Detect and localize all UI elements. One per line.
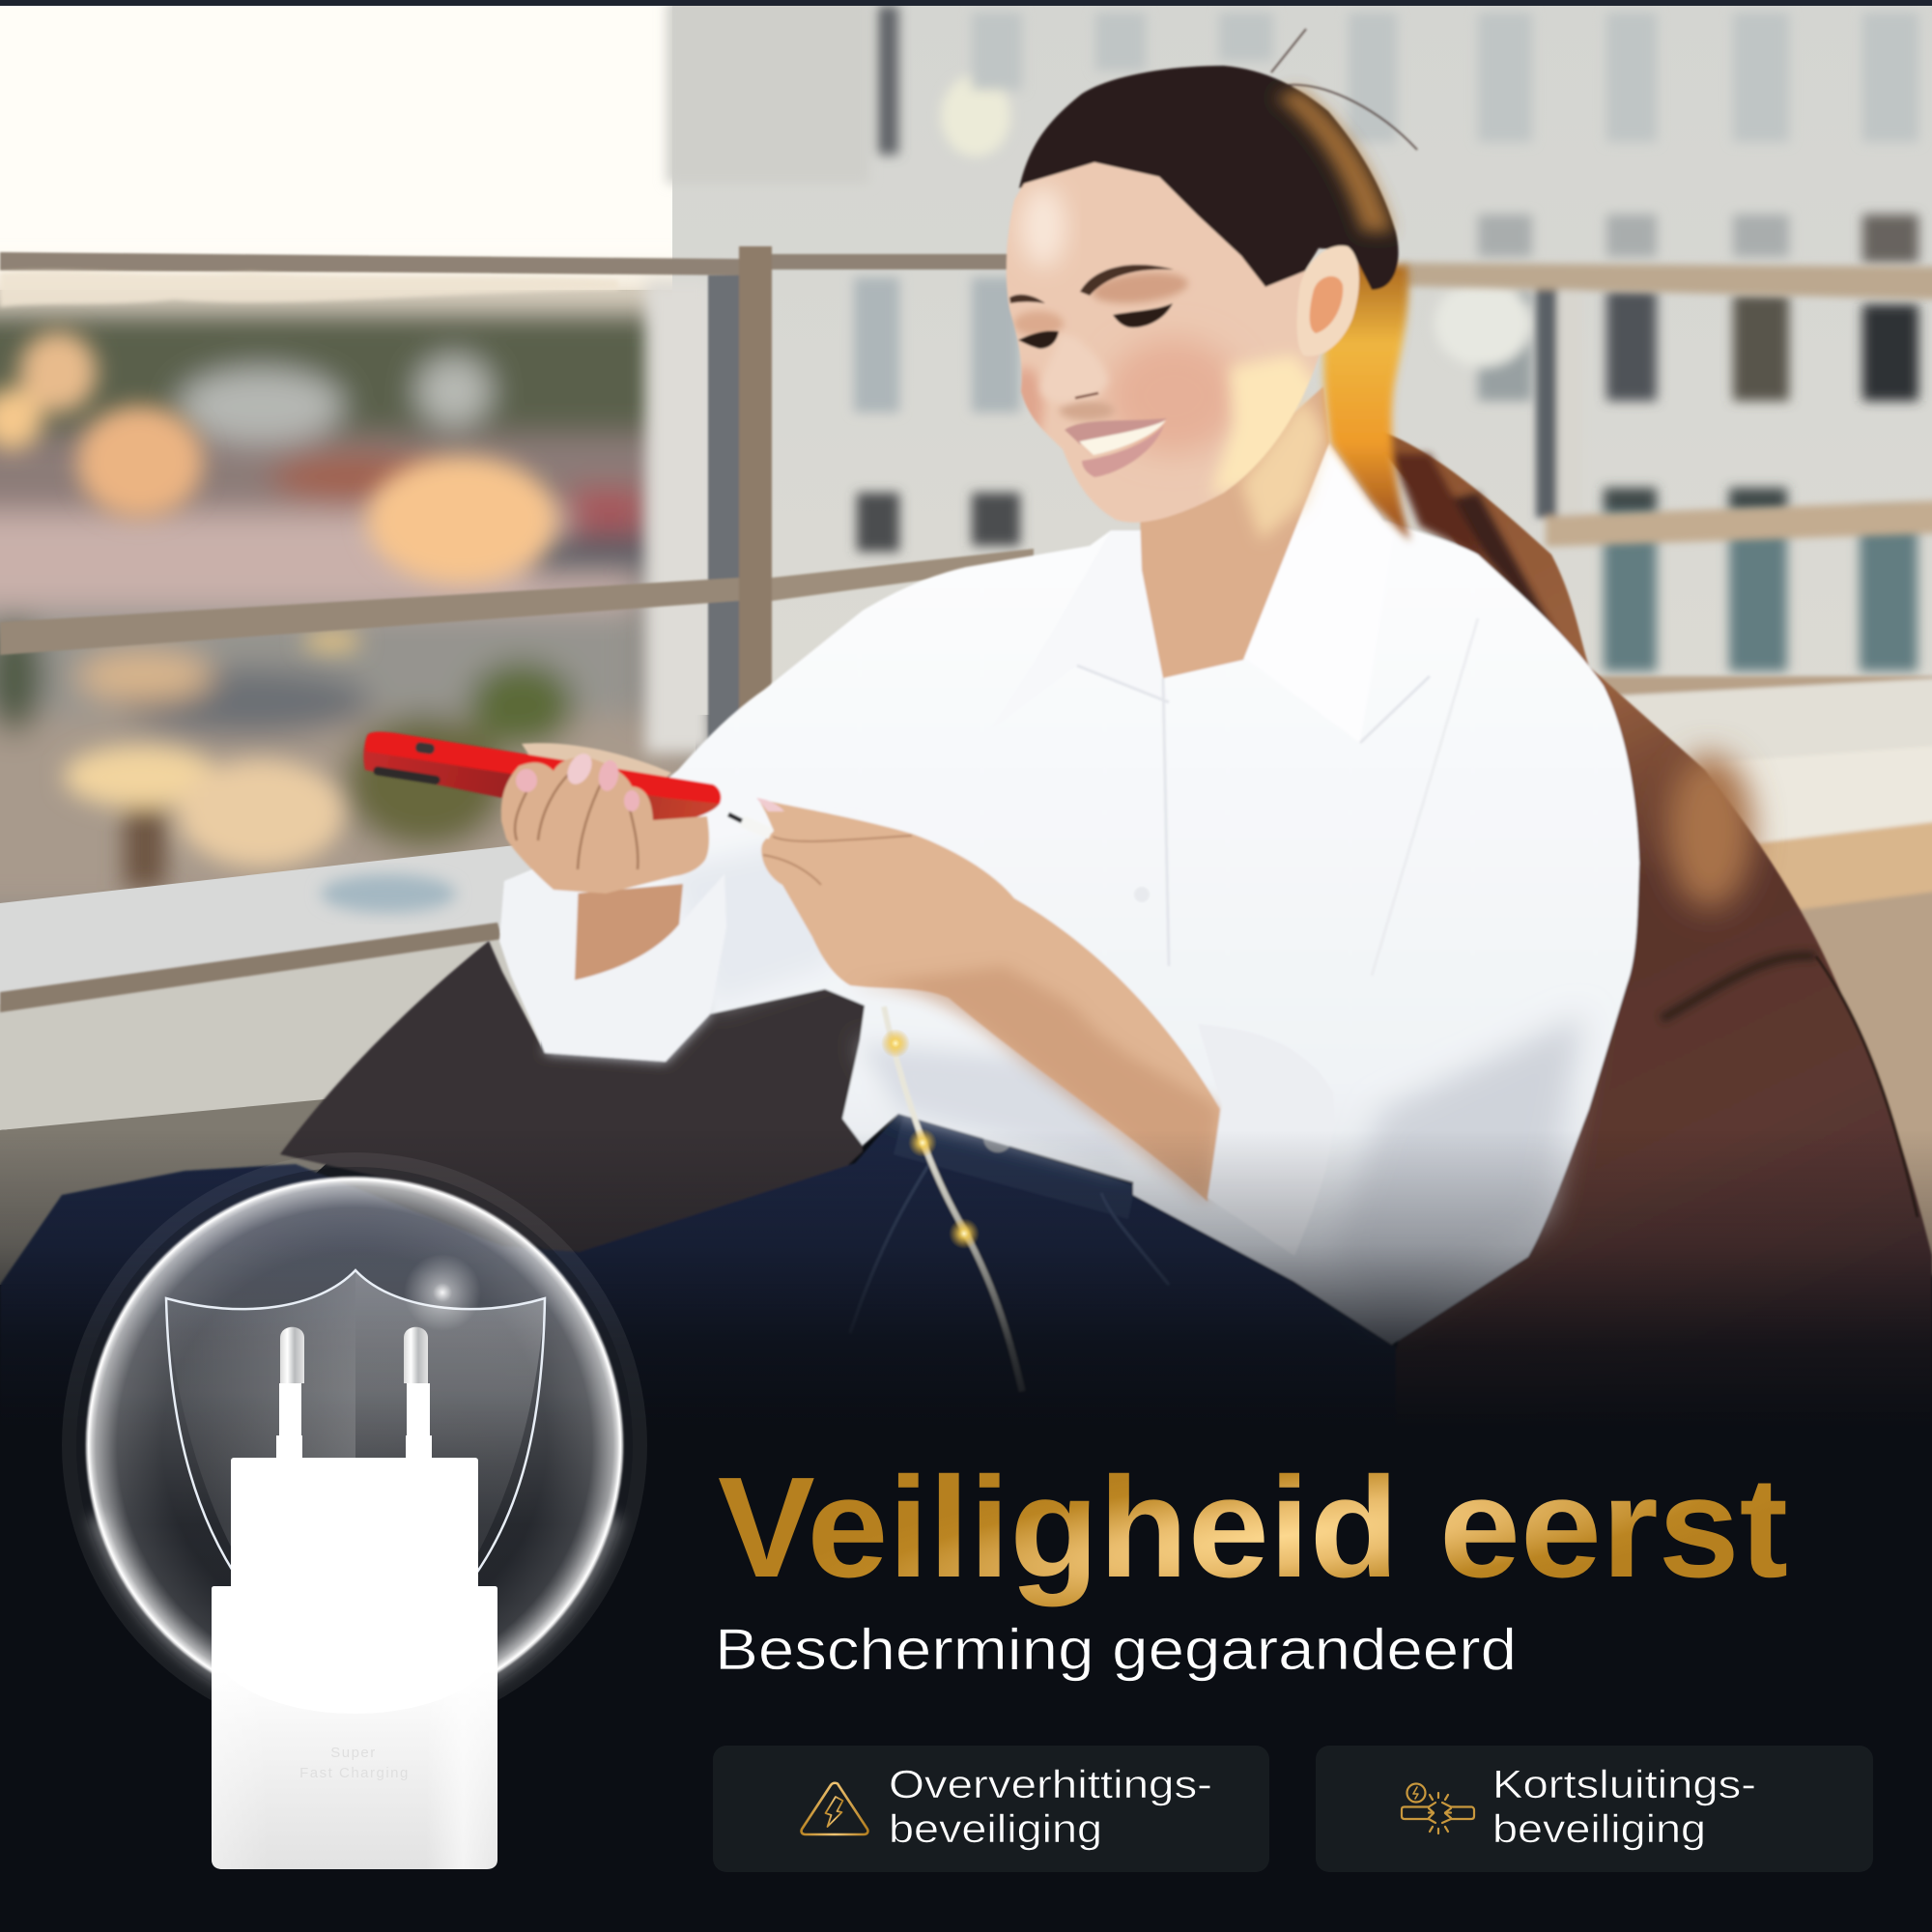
red phone	[363, 732, 721, 826]
hair	[1019, 66, 1399, 290]
building facade	[667, 0, 1932, 715]
cable glint	[949, 1218, 980, 1249]
fingernails	[516, 750, 639, 811]
stray hair strands	[1271, 29, 1417, 150]
cable glint	[881, 1029, 910, 1058]
outer halo	[62, 1152, 647, 1738]
phone camera	[373, 766, 440, 785]
eyes	[1018, 303, 1173, 349]
right shirt cuff	[1198, 1024, 1334, 1256]
card: overheating protection	[713, 1746, 1269, 1872]
charging cable	[884, 1007, 1022, 1391]
card: short-circuit protection	[1316, 1746, 1873, 1872]
white glow band on charger	[212, 1571, 497, 1714]
left hand holding phone	[501, 750, 709, 894]
USB-C plug	[728, 814, 771, 834]
heading: Veiligheid eerst	[718, 1448, 1788, 1607]
jeans	[0, 1114, 1396, 1507]
charger label	[299, 1745, 410, 1781]
dark gradient fade over photo	[0, 1130, 1932, 1430]
left ledge and wall	[0, 842, 541, 1285]
left collar	[990, 530, 1169, 730]
pale building wall beside city	[645, 280, 713, 753]
card text: Oververhittings-	[889, 1762, 1212, 1806]
top edge strip	[0, 0, 1932, 6]
right collar	[1163, 443, 1394, 743]
left wrist	[573, 884, 683, 980]
glass sphere	[88, 1179, 621, 1712]
ponytail	[1323, 261, 1410, 541]
card text	[1492, 1762, 1756, 1851]
railing	[0, 246, 1034, 1012]
smile	[1065, 418, 1167, 477]
cable glints	[881, 1029, 980, 1249]
eyebrows	[1009, 265, 1174, 303]
woman's head and neck	[1007, 29, 1417, 678]
cable glint	[908, 1128, 937, 1157]
plug pins	[276, 1327, 432, 1461]
thumbnail	[756, 798, 784, 811]
white shirt	[499, 443, 1639, 1345]
card text: beveiliging	[889, 1806, 1102, 1851]
blurred city view	[0, 275, 696, 927]
shirt button	[1134, 887, 1150, 902]
sparkle	[404, 1254, 481, 1331]
glass shield sphere with charger	[62, 1152, 647, 1869]
right arm and hand	[756, 798, 1220, 1202]
subheading: Bescherming gegarandeerd	[715, 1617, 1517, 1682]
photo: rooftop background	[0, 0, 1932, 1285]
hair sunlit highlight	[1275, 89, 1393, 232]
photo: woman on bean bag	[0, 29, 1932, 1507]
jeans button	[983, 1123, 1012, 1152]
far railing	[1401, 263, 1932, 547]
shield	[166, 1270, 545, 1700]
charger lower body	[212, 1586, 497, 1869]
phone side button	[414, 742, 436, 754]
icon: warning triangle with bolt	[802, 1783, 867, 1834]
solid dark lower area	[0, 1428, 1932, 1932]
charger label: Super	[330, 1745, 377, 1761]
charger upper body	[231, 1458, 478, 1593]
card text: beveiliging	[1492, 1806, 1706, 1851]
ear	[1297, 245, 1359, 356]
left sleeve cuff	[499, 855, 726, 1062]
dark trousers	[280, 941, 865, 1265]
face	[1007, 162, 1352, 523]
card text	[889, 1762, 1212, 1851]
sky	[0, 0, 734, 319]
charger label: Fast Charging	[299, 1765, 410, 1781]
card text: Kortsluitings-	[1492, 1762, 1756, 1806]
nose	[1040, 333, 1108, 403]
right ledge	[1449, 676, 1932, 1275]
icon: broken wire with spark	[1402, 1783, 1474, 1833]
bean bag	[1352, 425, 1932, 1507]
neck	[1140, 386, 1329, 678]
